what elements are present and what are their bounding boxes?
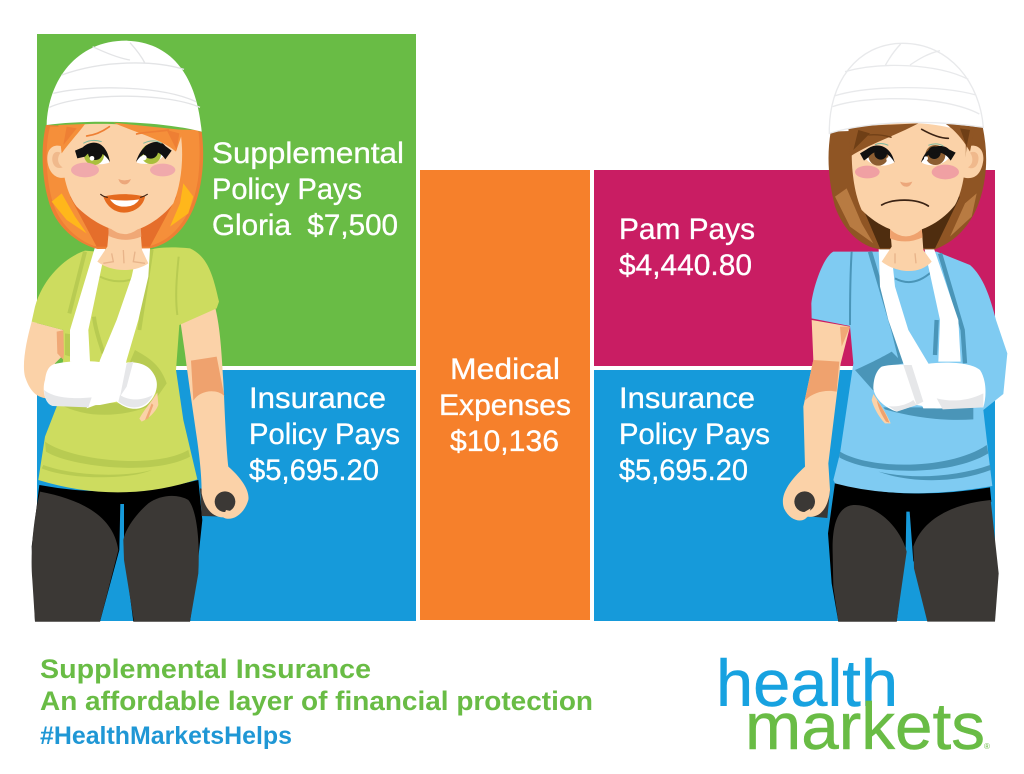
text: supplemental policy pays Gloria: Policy Pays [212, 173, 362, 206]
illustration: Gloria, happy woman with orange hair [24, 41, 249, 622]
text: insurance policy pays left [249, 382, 400, 487]
text: supplemental policy pays Gloria: Gloria $7,500 [212, 209, 398, 242]
text: supplemental policy pays Gloria: Supplemental [212, 137, 404, 170]
eyes [75, 140, 172, 165]
text: medical expenses: Medical [450, 353, 560, 386]
tagline: supplemental insurance: Supplemental Insurance [40, 654, 371, 684]
text: Pam pays [619, 213, 755, 282]
tagline: supplemental insurance [40, 654, 593, 750]
tagline: supplemental insurance: An affordable layer of financial protection [40, 686, 593, 716]
text: insurance policy pays left: Insurance [249, 382, 386, 415]
text: medical expenses: $10,136 [450, 425, 559, 458]
text: Pam pays: Pam Pays [619, 213, 755, 246]
panel: insurance policy left (blue) [37, 370, 416, 621]
logo: HealthMarkets: markets [745, 689, 985, 763]
illustration: Pam, sad woman with brown hair [783, 43, 1007, 622]
panel: medical expenses (orange) [420, 170, 590, 620]
logo: HealthMarkets: health [716, 646, 898, 720]
text: insurance policy pays right: Policy Pays [619, 418, 770, 451]
eyes [860, 143, 956, 166]
logo: HealthMarkets [716, 646, 990, 763]
logo: HealthMarkets: ® [984, 742, 990, 751]
text: insurance policy pays left: Policy Pays [249, 418, 400, 451]
mouth [882, 200, 928, 206]
panel: supplemental policy (green) [37, 34, 416, 366]
text: Pam pays: $4,440.80 [619, 249, 752, 282]
text: supplemental policy pays Gloria [212, 137, 404, 242]
text: insurance policy pays right: $5,695.20 [619, 454, 748, 487]
text: medical expenses: Expenses [439, 389, 571, 422]
mouth [103, 194, 145, 213]
tagline: supplemental insurance: #HealthMarketsHelps [40, 722, 292, 750]
panel: Pam pays (magenta) [594, 170, 995, 366]
text: medical expenses [439, 353, 571, 458]
text: insurance policy pays left: $5,695.20 [249, 454, 379, 487]
text: insurance policy pays right: Insurance [619, 382, 755, 415]
text: insurance policy pays right [619, 382, 770, 487]
panel: insurance policy right (blue) [594, 370, 995, 621]
